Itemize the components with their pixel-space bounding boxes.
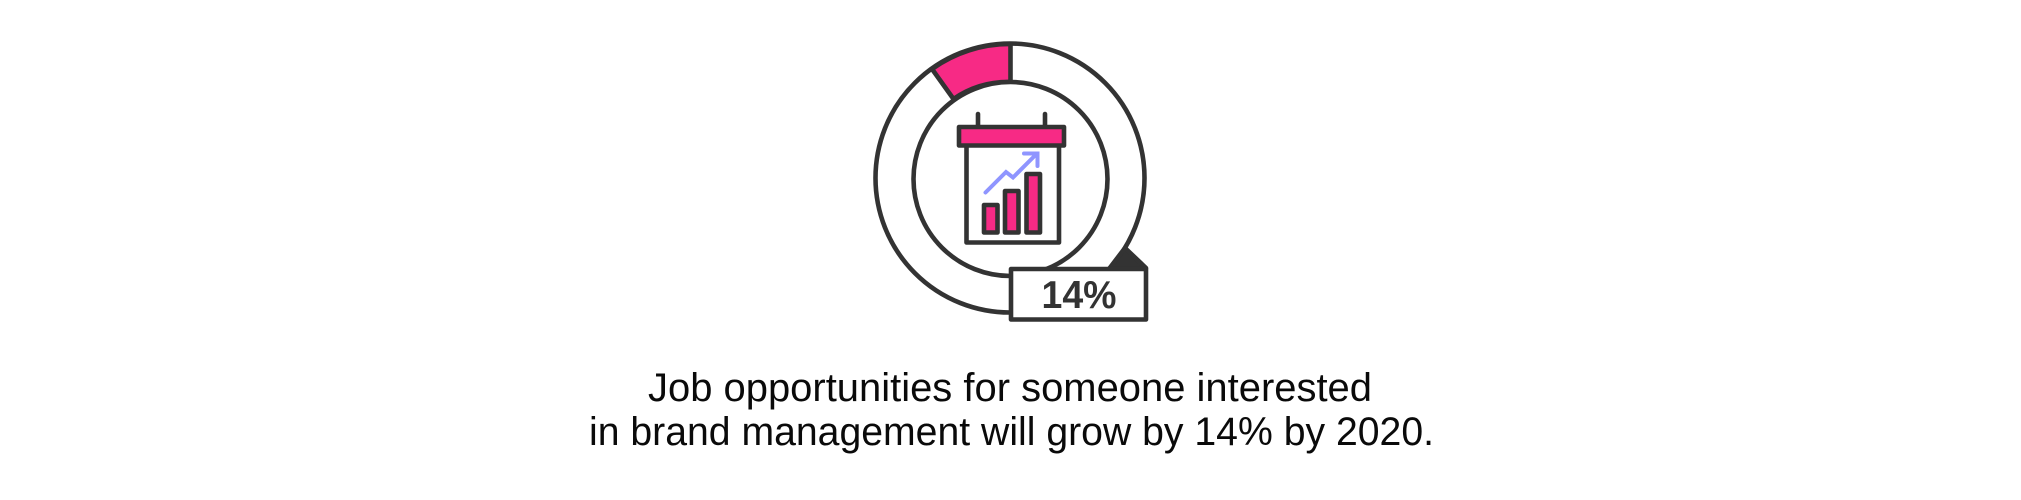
board body: [966, 145, 1059, 242]
board hanging pegs: [978, 114, 1045, 127]
caption line 2: in brand management will grow by 14% by 2020.: [589, 410, 1434, 454]
donut inner circle: [914, 82, 1108, 276]
caption: [589, 366, 1434, 454]
icon: growth arrow: [986, 154, 1038, 192]
bar chart: [984, 174, 1040, 232]
callout pointer: [1109, 248, 1146, 269]
board top rail: [959, 127, 1064, 146]
donut chart with 14% callout: [876, 44, 1146, 320]
donut highlighted segment: [932, 44, 1010, 99]
caption line 1: Job opportunities for someone interested: [648, 366, 1372, 410]
icon: chart board: [959, 114, 1064, 242]
donut outer ring: [876, 44, 1144, 312]
callout value: 14%: [1042, 274, 1116, 317]
callout box: [1011, 269, 1146, 320]
